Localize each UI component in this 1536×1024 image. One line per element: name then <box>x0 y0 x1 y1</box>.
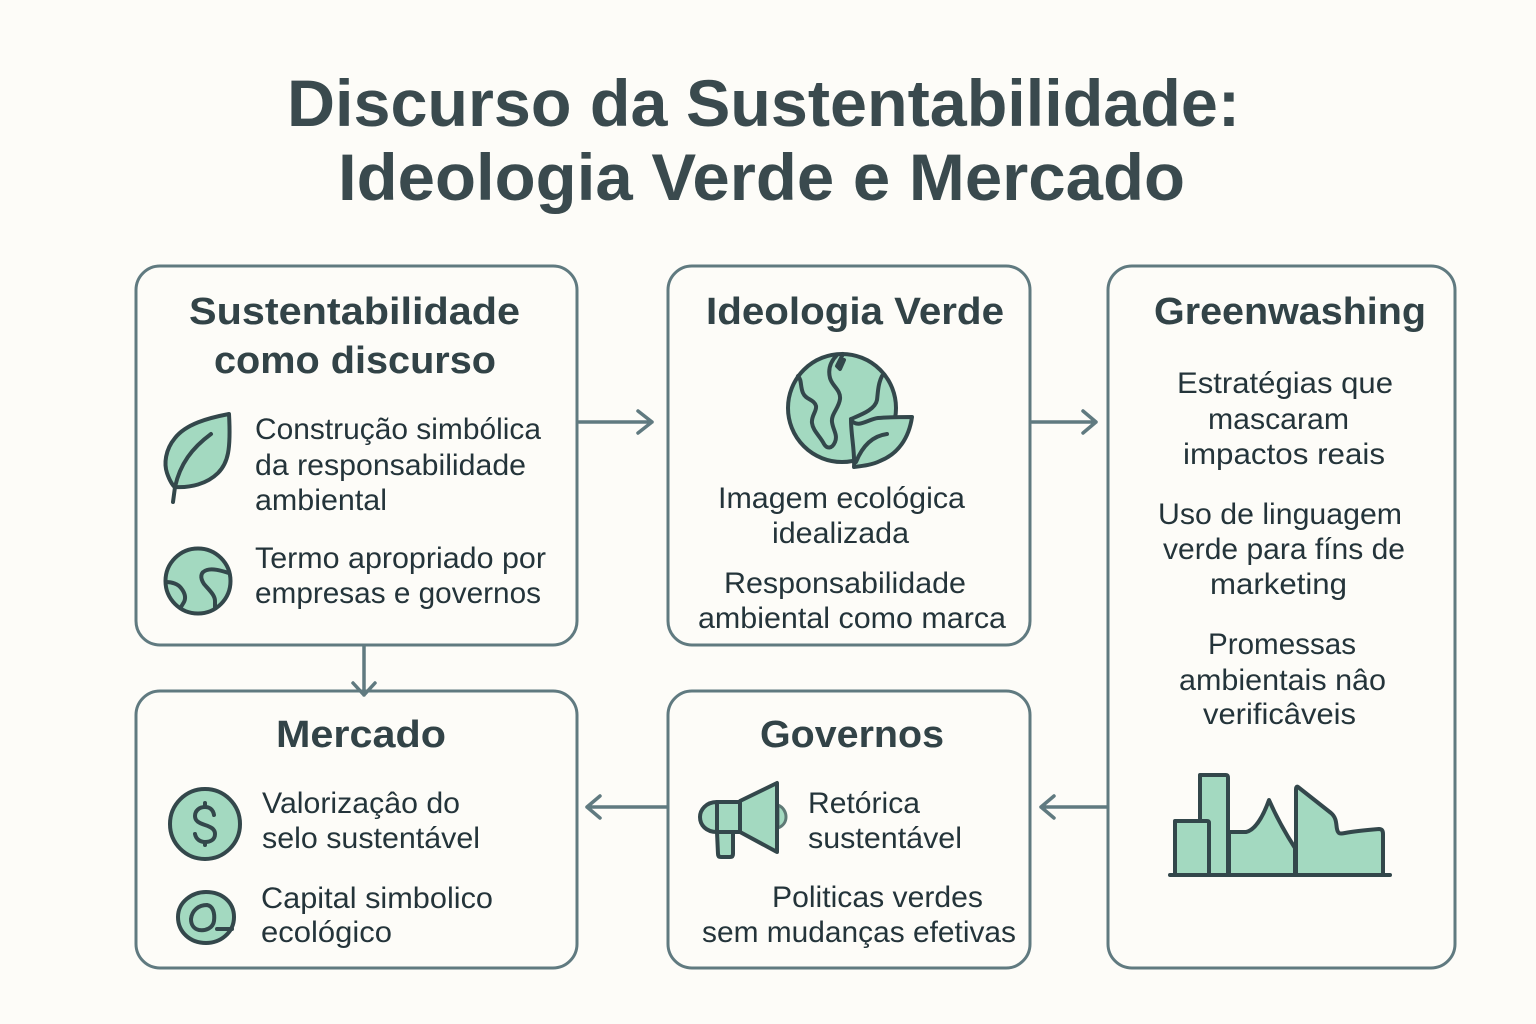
text: construção simbólica <box>255 413 541 517</box>
text: capital simbólico: Capital simbolico <box>261 882 493 915</box>
text: construção simbólica: ambiental <box>255 484 387 517</box>
heading: Governos: Governos <box>760 714 944 756</box>
text: valorização <box>262 787 480 855</box>
text: estratégias: mascaram <box>1208 403 1349 436</box>
text: estratégias <box>1177 367 1393 471</box>
icon: dollar coin <box>170 789 240 859</box>
text: políticas verdes: Politicas verdes <box>772 881 983 914</box>
text: termo apropriado: empresas e governos <box>255 577 541 610</box>
icon: symbolic capital <box>178 892 234 943</box>
heading: Sustentabilidade como discurso: Sustentabilidade <box>189 291 520 333</box>
icon: globe with leaf <box>788 354 912 467</box>
arrow: greenwashing to governos <box>1041 796 1107 818</box>
arrow: discurso to mercado <box>353 646 375 695</box>
text: políticas verdes <box>702 881 1016 949</box>
text: capital simbólico <box>261 882 493 949</box>
arrow: ideologia to greenwashing <box>1032 411 1096 433</box>
text: responsabilidade ambiental <box>698 567 1006 635</box>
arrow: governos to mercado <box>587 796 667 818</box>
text: promessas: verificâveis <box>1203 698 1356 731</box>
icon: small globe <box>166 548 230 614</box>
text: retórica <box>808 787 962 855</box>
text: promessas: ambientais nâo <box>1179 664 1386 697</box>
text: uso de linguagem: verde para fíns de <box>1163 533 1405 566</box>
heading: Greenwashing: Greenwashing <box>1154 291 1426 333</box>
icon: megaphone <box>700 783 786 857</box>
text: estratégias: impactos reais <box>1183 438 1385 471</box>
text: uso de linguagem <box>1158 498 1405 601</box>
text: uso de linguagem: Uso de linguagem <box>1158 498 1402 531</box>
icon: leaf <box>166 414 230 502</box>
text: estratégias: Estratégias que <box>1177 367 1393 400</box>
text: termo apropriado <box>255 542 546 610</box>
arrow: discurso to ideologia <box>579 411 652 433</box>
text: responsabilidade ambiental: ambiental como marca <box>698 602 1006 635</box>
text: termo apropriado: Termo apropriado por <box>255 542 546 575</box>
heading: Mercado: Mercado <box>276 714 446 756</box>
text: políticas verdes: sem mudanças efetivas <box>702 916 1016 949</box>
chart: area and bars <box>1170 775 1390 875</box>
title <box>287 66 1240 214</box>
heading: Sustentabilidade como discurso <box>189 291 520 382</box>
panel: Mercado <box>136 691 577 968</box>
panel: Governos <box>668 691 1030 968</box>
panel: Ideologia Verde <box>668 266 1030 645</box>
text: imagem ecológica <box>718 482 965 550</box>
text: imagem ecológica: idealizada <box>772 517 909 550</box>
text: capital simbólico: ecológico <box>261 916 392 949</box>
title: Ideologia Verde e Mercado <box>338 140 1185 214</box>
text: imagem ecológica: Imagem ecológica <box>718 482 965 515</box>
panel: Greenwashing <box>1108 266 1455 968</box>
text: valorização: Valorizaçâo do <box>262 787 460 820</box>
text: construção simbólica: da responsabilidade <box>255 449 526 482</box>
text: valorização: selo sustentável <box>262 822 480 855</box>
text: responsabilidade ambiental: Responsabilidade <box>724 567 966 600</box>
heading: Sustentabilidade como discurso: como discurso <box>214 340 496 382</box>
text: retórica: sustentável <box>808 822 962 855</box>
title: Discurso da Sustentabilidade: <box>287 66 1240 140</box>
text: construção simbólica: Construção simbólica <box>255 413 541 446</box>
text: retórica: Retórica <box>808 787 920 820</box>
text: promessas <box>1179 628 1386 731</box>
heading: Ideologia Verde: Ideologia Verde <box>706 291 1004 333</box>
text: promessas: Promessas <box>1208 628 1356 661</box>
panel: Sustentabilidade como discurso <box>136 266 577 645</box>
text: uso de linguagem: marketing <box>1210 568 1347 601</box>
